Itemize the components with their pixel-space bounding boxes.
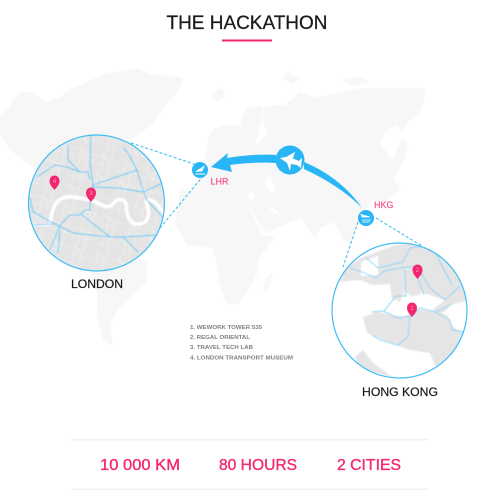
Hong Kong roads xyxy=(350,245,465,345)
London label: LONDON xyxy=(71,277,123,291)
venue list: 4. LONDON TRANSPORT MUSEUM xyxy=(190,356,293,362)
LHR marker xyxy=(192,162,208,178)
pin 4: 4 xyxy=(53,179,57,185)
pin 2: 2 xyxy=(416,268,420,274)
dashed connector: London xyxy=(131,143,203,228)
stats band xyxy=(71,439,428,490)
title: THE HACKATHON xyxy=(166,13,328,34)
London map circle xyxy=(28,135,166,272)
stat: distance: 10 000 KM xyxy=(100,457,180,474)
London street texture xyxy=(28,135,165,272)
venue list: 1. WEWORK TOWER 535 xyxy=(190,325,263,331)
dashed connector: Hong Kong xyxy=(343,218,422,267)
title underline xyxy=(222,40,272,42)
world map xyxy=(0,68,425,347)
Hong Kong land xyxy=(340,242,470,377)
venue list: 3. TRAVEL TECH LAB xyxy=(190,345,253,351)
plane badge xyxy=(276,146,304,174)
pin 4 xyxy=(50,176,60,190)
pin 1 xyxy=(407,302,417,317)
pin 2 xyxy=(412,264,422,279)
venue list: 2. REGAL ORIENTAL xyxy=(190,335,250,341)
stat: cities: 2 CITIES xyxy=(337,457,401,474)
Hong Kong label: HONG KONG xyxy=(362,385,438,399)
Hong Kong map circle xyxy=(332,242,470,378)
River Thames xyxy=(50,197,166,225)
pin 3 xyxy=(86,188,96,202)
map seas xyxy=(247,100,430,216)
Hong Kong airport xyxy=(361,256,378,276)
flight arc xyxy=(211,153,362,208)
venue list xyxy=(190,325,293,362)
stat: hours: 80 HOURS xyxy=(219,457,297,474)
HKG label: HKG xyxy=(374,200,394,210)
London roads xyxy=(30,135,165,253)
pin 1: 1 xyxy=(410,306,414,312)
LHR label: LHR xyxy=(210,176,229,186)
pin 3: 3 xyxy=(89,191,93,197)
HKG marker xyxy=(358,210,374,226)
